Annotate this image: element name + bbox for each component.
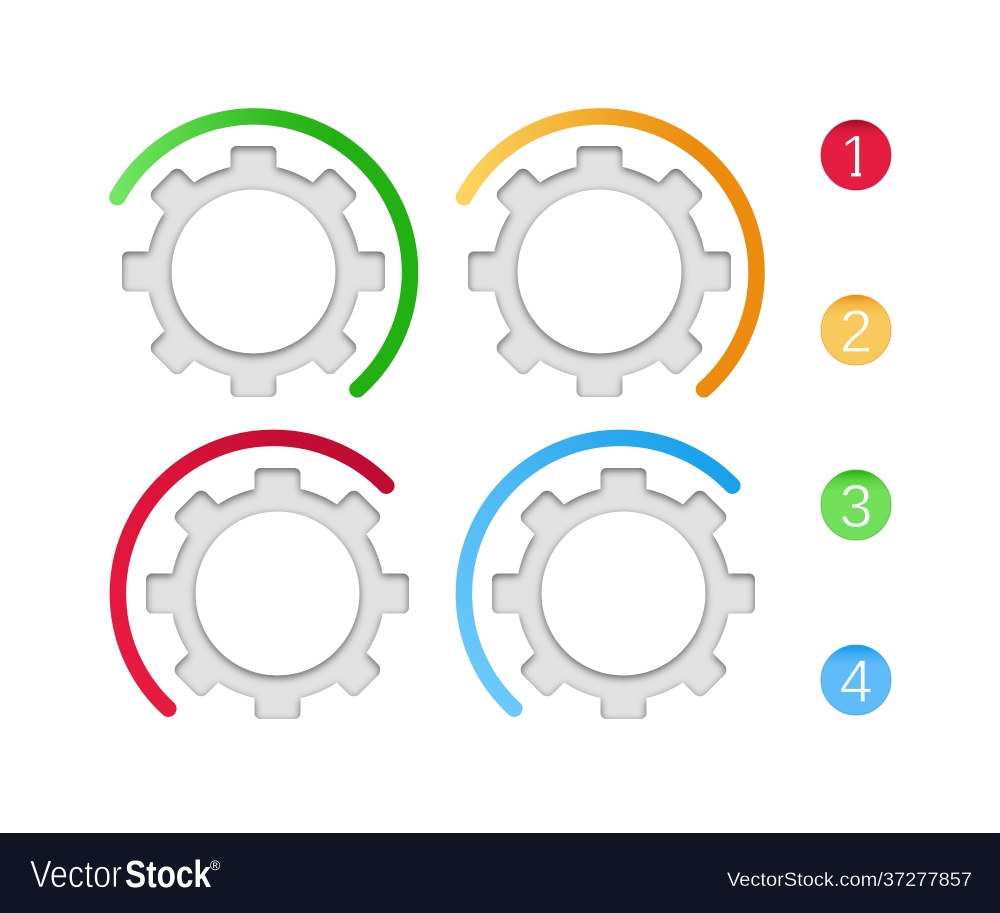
arc: green (117, 116, 410, 389)
image id: VectorStock.com/37277857 (727, 869, 972, 891)
logo: VectorStock (30, 854, 212, 896)
arc: orange (464, 116, 757, 389)
badge: number 3 (821, 470, 891, 540)
badge: number 3: 3 (839, 473, 873, 540)
badge: number 4 (821, 645, 891, 715)
panel: green gear with arc (117, 116, 410, 397)
badge: number 2: 2 (839, 298, 873, 365)
icon: gear 2 (468, 146, 731, 397)
panel: red gear with arc (118, 438, 409, 719)
icon: gear 4 (492, 468, 755, 719)
icon: gear 1 (122, 146, 385, 397)
badge: number 1: 1 (839, 123, 873, 190)
arc: red (118, 438, 386, 709)
icon: gear 3 (146, 468, 409, 719)
registered mark: ® (210, 857, 221, 873)
logo: VectorStock: Vector (30, 854, 122, 896)
badge: number 2 (821, 295, 891, 365)
footer bar (0, 833, 1000, 913)
badge: number 1 (821, 120, 891, 190)
panel: blue gear with arc (464, 438, 755, 719)
logo: VectorStock: Stock (125, 854, 212, 896)
panel: orange gear with arc (464, 116, 757, 397)
arc: blue (464, 438, 732, 709)
badge: number 4: 4 (839, 648, 873, 715)
